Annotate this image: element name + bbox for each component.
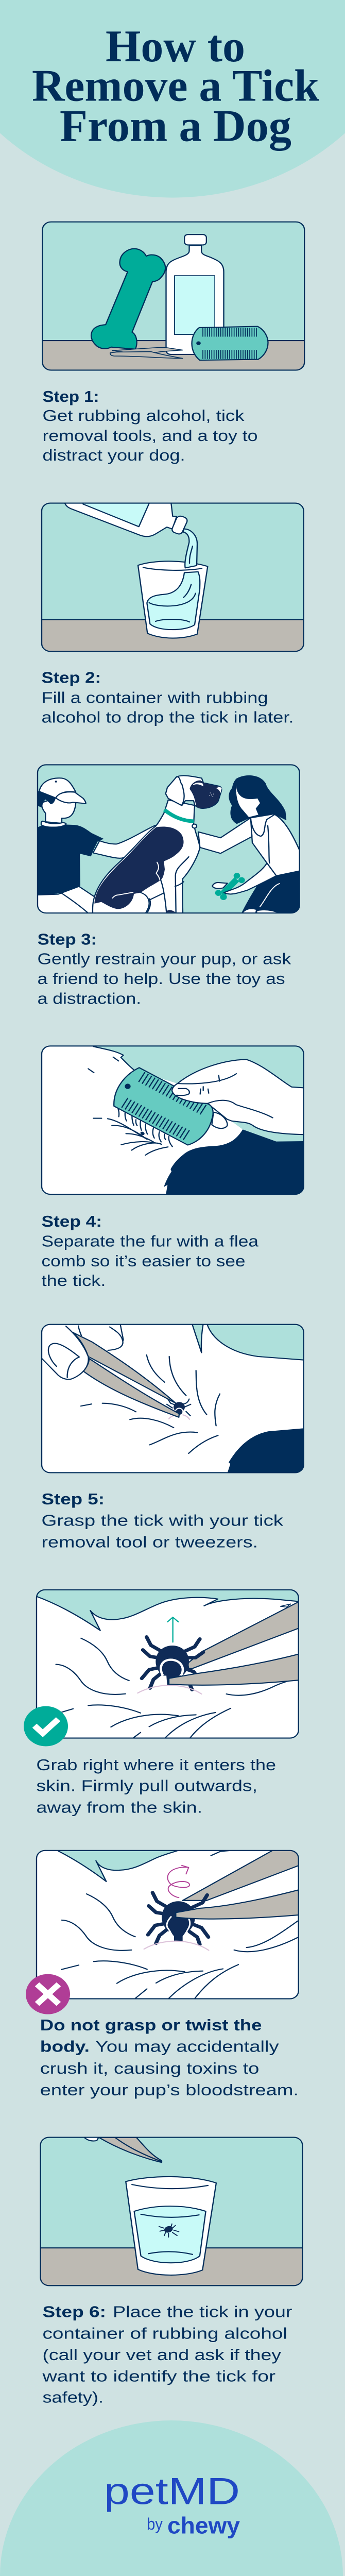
icon: bone toy — [91, 249, 165, 349]
title: How to — [106, 22, 245, 72]
title: Remove a Tick — [32, 61, 319, 111]
step 3 text: Step 3: — [38, 930, 97, 948]
step 6 text: safety). — [42, 2388, 104, 2406]
woman's lower arm, shorts and bone toy — [213, 826, 300, 913]
icon: glass with water — [138, 561, 208, 638]
woman's arm and top — [198, 776, 300, 876]
icon: green check badge — [24, 1706, 68, 1747]
header background arc — [0, 0, 345, 198]
step 6 text: Step 6: — [42, 2303, 106, 2320]
step 4 text — [41, 1213, 259, 1290]
logo: petMD by chewy — [104, 2470, 240, 2539]
fur hairs — [56, 1638, 298, 1738]
step 1 text: Get rubbing alcohol, tick — [42, 406, 245, 425]
step 1 text: Step 1: — [42, 387, 99, 405]
title: From a Dog — [60, 101, 291, 151]
icon: tweezers lower prong — [176, 1889, 301, 1919]
footer arc — [0, 2420, 343, 2576]
step 3 text: Gently restrain your pup, or ask — [38, 950, 291, 968]
background and dark fur — [192, 1323, 305, 1473]
icon: tweezers — [83, 2137, 162, 2162]
fur hairs and tick — [88, 1057, 173, 1155]
icon: flea comb — [114, 1067, 213, 1145]
step 2 text: Step 2: — [41, 669, 101, 686]
logo: petMD by chewy: petMD — [104, 2470, 240, 2513]
panel: step 4 illustration — [40, 1045, 305, 1196]
logo: petMD by chewy: chewy — [167, 2513, 240, 2539]
icon: magenta X badge — [26, 1974, 70, 2014]
panel: step 2 illustration — [40, 502, 305, 654]
icon: small tick — [159, 2224, 179, 2237]
fur hairs — [62, 1894, 298, 1998]
step 6 text: Place the tick in your — [113, 2303, 292, 2320]
step 3 text: a friend to help. Use the toy as — [38, 970, 285, 988]
thumb — [40, 1325, 89, 1379]
thumb — [172, 1074, 273, 1118]
step 1 text — [42, 387, 257, 464]
icon: upward arrow — [167, 1617, 178, 1642]
panel: incorrect technique illustration — [35, 1849, 301, 2001]
step 6 text — [42, 2303, 292, 2406]
step 6 text: container of rubbing alcohol — [42, 2325, 287, 2342]
icon: flea comb — [192, 327, 268, 360]
fur hairs — [81, 1355, 220, 1453]
hand — [178, 1059, 305, 1134]
correct technique text: skin. Firmly pull outwards, — [36, 1777, 257, 1794]
icon: twisting arrow — [168, 1866, 189, 1897]
incorrect technique text — [40, 2016, 299, 2099]
step 6 text: want to identify the tick for — [42, 2367, 275, 2385]
step 5 text: Step 5: — [41, 1490, 105, 1507]
title — [32, 22, 319, 151]
icon: tick — [148, 1893, 209, 1944]
hand — [78, 1326, 124, 1350]
incorrect technique text: crush it, causing toxins to — [40, 2060, 259, 2077]
icon: tick — [142, 1637, 203, 1690]
icon: glass with tick — [126, 2177, 216, 2275]
logo: petMD by chewy: by — [147, 2515, 163, 2534]
incorrect technique text: You may accidentally — [95, 2038, 279, 2055]
incorrect technique text: body. — [40, 2038, 90, 2055]
skin line — [144, 1941, 209, 1951]
skin line — [137, 1685, 201, 1694]
incorrect technique text: Do not grasp or twist the — [40, 2016, 262, 2034]
panel: step 6 illustration — [39, 2136, 304, 2288]
step 1 text: removal tools, and a toy to — [42, 427, 257, 445]
step 5 text: removal tool or tweezers. — [41, 1533, 258, 1551]
step 5 text: Grasp the tick with your tick — [41, 1512, 284, 1529]
dog collar — [164, 810, 194, 821]
icon: tweezers upper prong — [183, 1849, 301, 1901]
icon: alcohol stream — [183, 529, 197, 568]
panel: step 3 illustration — [36, 764, 301, 915]
step 1 text: distract your dog. — [42, 447, 185, 464]
dog — [93, 776, 222, 913]
step 3 text: a distraction. — [38, 990, 141, 1007]
icon: tweezers upper prong — [188, 1601, 301, 1669]
step 4 text: Separate the fur with a flea — [41, 1232, 259, 1250]
icon: rubbing alcohol bottle — [166, 234, 223, 354]
icon: tilted bottle — [64, 502, 187, 536]
step 2 text: alcohol to drop the tick in later. — [41, 708, 294, 726]
step 4 text: the tick. — [41, 1272, 106, 1290]
step 6 text: (call your vet and ask if they — [42, 2346, 282, 2363]
step 4 text: Step 4: — [41, 1213, 102, 1230]
icon: tweezers — [110, 347, 182, 358]
incorrect technique text: enter your pup’s bloodstream. — [40, 2081, 299, 2099]
step 3 text — [38, 930, 291, 1007]
panel: step 1 illustration — [41, 221, 306, 372]
dark fur — [164, 1129, 305, 1195]
icon: tweezers with tick — [73, 1332, 191, 1419]
correct technique text: Grab right where it enters the — [36, 1756, 276, 1773]
panel: step 5 illustration — [40, 1323, 305, 1475]
correct technique text — [36, 1756, 276, 1816]
icon: tweezers lower prong — [169, 1653, 301, 1685]
step 4 text: comb so it’s easier to see — [41, 1252, 245, 1269]
panel: correct technique illustration — [35, 1588, 301, 1741]
step 2 text — [41, 669, 294, 726]
man holding the dog — [36, 778, 160, 913]
step 2 text: Fill a container with rubbing — [41, 689, 268, 706]
step 5 text — [41, 1490, 284, 1551]
correct technique text: away from the skin. — [36, 1799, 202, 1816]
